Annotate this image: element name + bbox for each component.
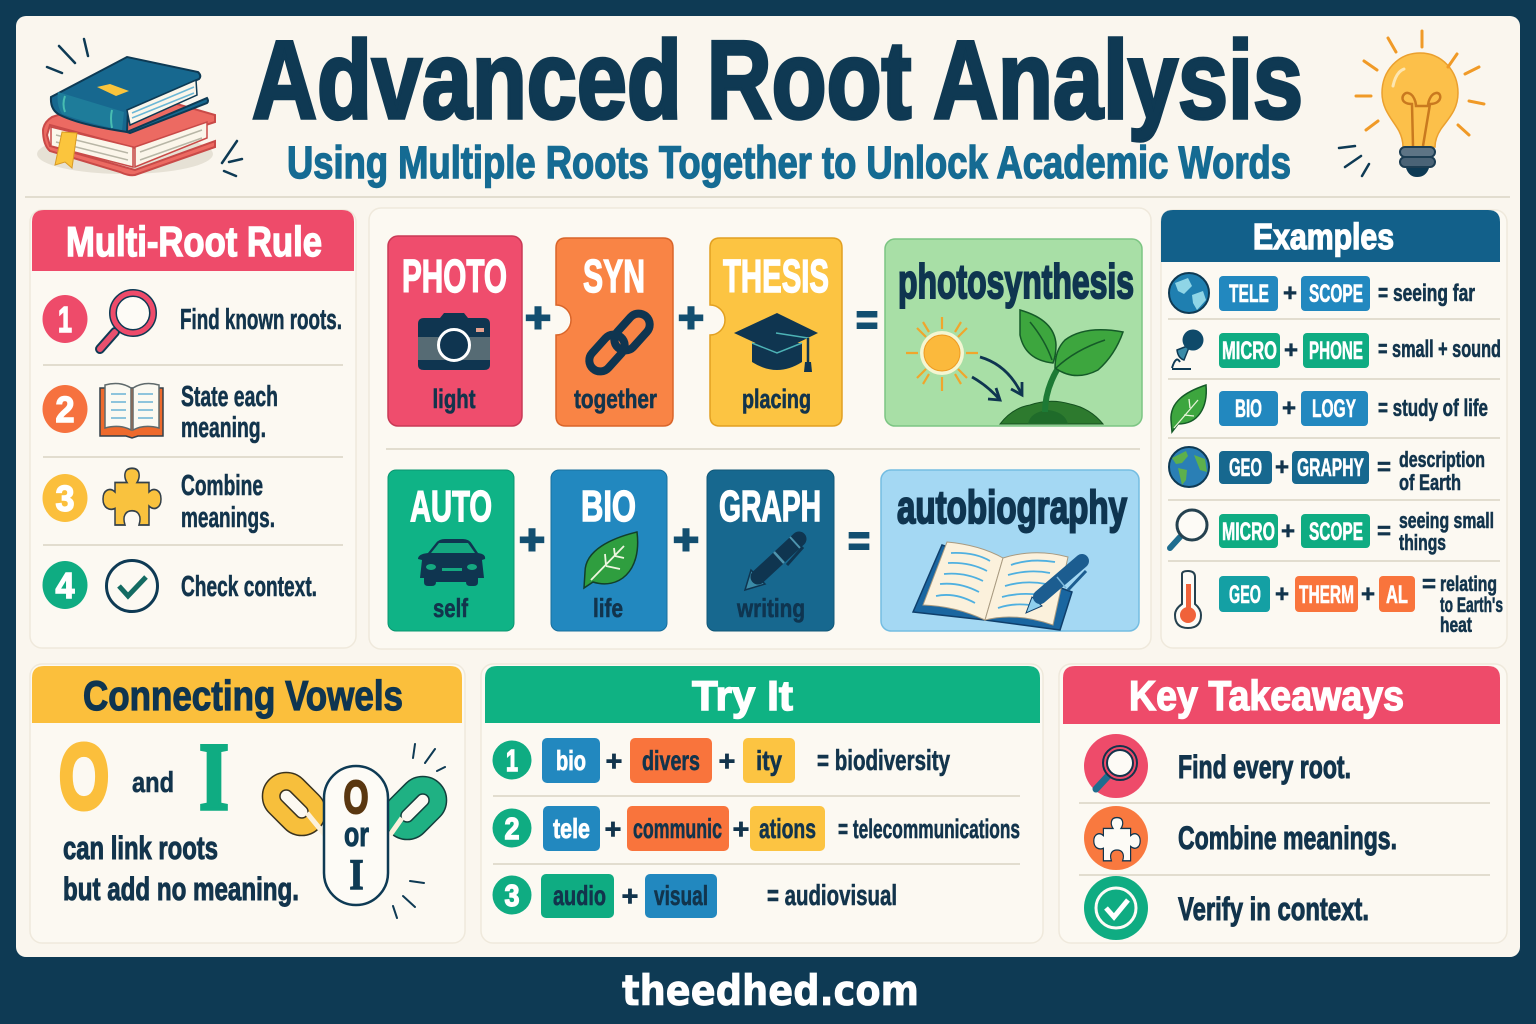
exercise 2: telecommunications: +: [733, 814, 749, 846]
result: photosynthesis: [885, 239, 1142, 426]
tile: GRAPH: GRAPH: [719, 482, 821, 531]
example: micro + scope: [1170, 508, 1494, 555]
example: geo + therm + al: to Earth's: [1440, 594, 1503, 617]
exercise 3: audiovisual: visual: [654, 880, 708, 911]
icon: leaf: [584, 532, 638, 588]
step 2: state each meaning: meaning.: [181, 412, 266, 444]
icon: car: [418, 539, 485, 586]
icon: seedling: [1000, 310, 1123, 424]
example: tele + scope: +: [1283, 280, 1297, 307]
panel header: Multi-Root Rule: Multi-Root Rule: [66, 218, 322, 265]
tile: THESIS: placing: [742, 384, 811, 414]
takeaway: verify in context: [1084, 876, 1369, 940]
exercise 3: audiovisual: = audiovisual: [767, 880, 897, 912]
example: micro + scope: +: [1281, 518, 1295, 545]
example: geo + graphy: [1169, 447, 1485, 495]
panel: root equations: [369, 208, 1151, 649]
step 1: find known roots: Find known roots.: [180, 304, 342, 336]
result: photosynthesis: photosynthesis: [898, 256, 1134, 309]
panel: Multi-Root Rule: [30, 210, 356, 648]
example: micro + phone: [1172, 330, 1501, 369]
example: micro + scope: things: [1399, 530, 1446, 555]
plus: +: [525, 294, 551, 341]
exercise 2: telecommunications: 2: [504, 811, 520, 846]
example: geo + graphy: GEO: [1229, 454, 1262, 482]
exercise 1: biodiversity: +: [606, 746, 622, 778]
icon: chain with vowel link: I: [350, 852, 364, 899]
example: geo + graphy: +: [1275, 454, 1289, 481]
icon: stacked books: [37, 39, 242, 176]
icon: chain link: [585, 309, 654, 376]
example: geo + graphy: =: [1377, 454, 1391, 481]
example: micro + scope: =: [1377, 518, 1391, 545]
result: autobiography: [881, 470, 1139, 631]
example: geo + therm + al: relating: [1440, 573, 1497, 596]
step 3: combine meanings: Combine: [181, 470, 263, 502]
example: geo + therm + al: +: [1275, 581, 1289, 608]
tile: SYN: together: [574, 384, 657, 414]
takeaway: combine meanings: [1084, 806, 1397, 870]
exercise 2: telecommunications: communic: [633, 813, 722, 844]
panel header: Examples: Examples: [1253, 216, 1394, 257]
exercise 1: biodiversity: bio: [556, 745, 586, 776]
icon: chain with vowel link: O: [344, 771, 368, 823]
exercise 2: telecommunications: [492, 806, 1020, 851]
example: tele + scope: [1169, 273, 1475, 313]
step 4: check context: [42, 560, 317, 612]
example: tele + scope: TELE: [1229, 280, 1269, 308]
note: link roots: [63, 830, 299, 907]
panel header: Connecting Vowels: Connecting Vowels: [83, 672, 403, 719]
panel: Examples: [1161, 210, 1507, 648]
plus: +: [673, 516, 699, 563]
example: micro + phone: +: [1284, 337, 1298, 364]
example: geo + graphy: of Earth: [1399, 470, 1461, 495]
exercise 2: telecommunications: = telecommunications: [838, 814, 1020, 844]
step 4: check context: Check context.: [181, 571, 317, 603]
exercise 2: telecommunications: tele: [553, 813, 590, 844]
exercise 2: telecommunications: ations: [759, 813, 816, 844]
panel header: Key Takeaways: Key Takeaways: [1129, 672, 1404, 719]
example: geo + therm + al: GEO: [1229, 581, 1261, 609]
exercise 1: biodiversity: ity: [756, 745, 782, 776]
panel: Try It: [481, 664, 1043, 943]
tile: AUTO: self: [433, 593, 468, 623]
takeaway: find every root: [1084, 734, 1351, 798]
equals: =: [856, 296, 878, 343]
example: tele + scope: SCOPE: [1309, 280, 1363, 308]
tile: THESIS: [710, 238, 842, 426]
icon: open book with pen: [913, 542, 1086, 630]
example: tele + scope: = seeing far: [1378, 280, 1475, 307]
example: micro + phone: PHONE: [1309, 337, 1363, 365]
exercise 2: telecommunications: +: [605, 814, 621, 846]
icon: sun: [906, 317, 978, 391]
tile: AUTO: [388, 470, 514, 631]
icon: chain with vowel link: or: [344, 816, 369, 854]
example: micro + scope: seeing small: [1399, 508, 1494, 533]
step 1: find known roots: 1: [58, 299, 72, 340]
tile: THESIS: THESIS: [723, 250, 829, 302]
exercise 1: biodiversity: 1: [506, 743, 518, 778]
icon: pen: [745, 537, 803, 590]
title: Advanced Root Analysis: [252, 19, 1303, 142]
step 4: check context: 4: [56, 565, 74, 606]
tile: BIO: BIO: [581, 482, 636, 531]
note: link roots: can link roots: [63, 830, 218, 866]
result: autobiography: autobiography: [897, 481, 1127, 533]
tile: BIO: [551, 470, 667, 631]
exercise 1: biodiversity: divers: [642, 745, 700, 776]
panel: Connecting Vowels: [30, 664, 465, 943]
takeaway: combine meanings: Combine meanings.: [1178, 820, 1397, 856]
step 3: combine meanings: meanings.: [181, 502, 275, 534]
step 3: combine meanings: [42, 468, 275, 534]
tile: GRAPH: writing: [736, 593, 805, 623]
icon: light bulb: [1339, 31, 1484, 177]
icon: graduation cap: [734, 313, 818, 372]
example: bio + logy: = study of life: [1378, 395, 1488, 422]
exercise 1: biodiversity: = biodiversity: [817, 745, 950, 777]
example: geo + graphy: description: [1399, 447, 1485, 472]
vowel O: O: [59, 726, 109, 828]
icon: camera: [418, 313, 490, 370]
step 2: state each meaning: 2: [56, 389, 74, 430]
example: micro + scope: SCOPE: [1309, 518, 1363, 546]
step 2: state each meaning: State each: [181, 381, 278, 413]
panel header: Key Takeaways: [1063, 666, 1500, 724]
and: and: [132, 767, 174, 799]
exercise 1: biodiversity: +: [719, 746, 735, 778]
panel header: Try It: [485, 666, 1040, 723]
plus: +: [519, 516, 545, 563]
exercise 3: audiovisual: audio: [553, 880, 606, 911]
example: micro + phone: MICRO: [1222, 337, 1277, 365]
plus: +: [678, 294, 704, 341]
tile: SYN: SYN: [583, 250, 645, 302]
exercise 3: audiovisual: 3: [504, 878, 520, 913]
panel: Key Takeaways: [1059, 664, 1507, 943]
exercise 1: biodiversity: [492, 738, 950, 783]
example: geo + therm + al: heat: [1440, 614, 1472, 637]
example: geo + therm + al: THERM: [1299, 581, 1354, 609]
example: bio + logy: BIO: [1235, 395, 1262, 423]
tile: AUTO: AUTO: [410, 482, 492, 531]
example: bio + logy: [1171, 385, 1488, 432]
example: bio + logy: LOGY: [1312, 395, 1356, 423]
exercise 3: audiovisual: +: [622, 881, 638, 913]
tile: GRAPH: [707, 470, 834, 631]
example: geo + therm + al: =: [1422, 571, 1436, 598]
footer: site name: theedhed.com: [622, 966, 919, 1015]
vowel I: I: [199, 723, 229, 830]
tile: SYN: [556, 238, 673, 426]
tile: PHOTO: PHOTO: [402, 250, 507, 302]
equals: =: [848, 517, 870, 564]
tile: PHOTO: light: [432, 384, 476, 414]
example: geo + graphy: GRAPHY: [1297, 454, 1364, 482]
step 3: combine meanings: 3: [56, 478, 74, 519]
takeaway: verify in context: Verify in context.: [1178, 891, 1369, 927]
tile: PHOTO: [388, 236, 522, 426]
example: micro + scope: MICRO: [1222, 518, 1275, 546]
arrows to plant: [972, 357, 1022, 400]
panel header: Multi-Root Rule: [32, 210, 354, 271]
step 2: state each meaning: [42, 381, 278, 444]
exercise 3: audiovisual: [492, 874, 897, 918]
example: bio + logy: +: [1282, 395, 1296, 422]
example: geo + therm + al: [1175, 571, 1503, 637]
note: link roots: but add no meaning.: [63, 871, 299, 907]
example: geo + therm + al: +: [1361, 581, 1375, 608]
tile: BIO: life: [593, 593, 623, 623]
step 1: find known roots: [42, 293, 342, 349]
takeaway: find every root: Find every root.: [1178, 749, 1351, 785]
panel header: Examples: [1161, 210, 1500, 262]
icon: chain with vowel link: [265, 744, 445, 918]
panel header: Try It: Try It: [692, 672, 793, 719]
example: geo + therm + al: AL: [1386, 581, 1408, 609]
subtitle: Using Multiple Roots Together to Unlock Academic Words: [287, 137, 1291, 188]
